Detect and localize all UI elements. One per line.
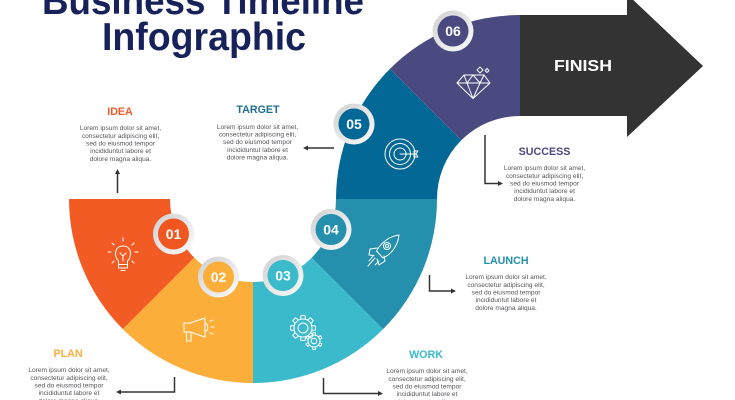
title [42,0,364,59]
text: launch: LAUNCH [483,255,529,267]
text: idea: sed do eiusmod tempor [86,140,156,148]
badge 03: 03 [275,268,291,284]
arrow: launch [430,275,456,294]
text: idea: consectetur adipiscing elit, [82,133,159,140]
text: launch [465,255,547,312]
text: target: incididuntut labore et [227,147,288,154]
text: plan [28,348,110,400]
text: launch: sed do eiusmod tempor [472,290,541,296]
text: launch: Lorem ipsum dolor sit amet, [465,274,547,281]
text: idea: dolore magna aliqua. [90,156,151,163]
text: target: consectetur adipiscing elit, [219,132,296,138]
badge 05: 05 [346,116,362,132]
text: idea: IDEA [107,106,133,118]
text: success: SUCCESS [519,146,570,158]
text: target: sed do eiusmod tempor [223,139,293,146]
icon: light bulb [108,238,138,270]
text: plan: consectetur adipiscing elit, [30,375,108,382]
text: work: consectetur adipiscing elit, [388,376,466,383]
text: work: WORK [409,349,443,361]
segment 3: work [253,258,383,383]
badge 04: 04 [323,222,339,238]
text: success [504,146,585,203]
arrow: idea [115,169,120,193]
text: work: sed do eiusmod tempor [393,384,462,390]
text: success: Lorem ipsum dolor sit amet, [504,165,585,172]
badge 04 [310,209,352,250]
badge 06 [432,10,474,52]
badge 05 [334,104,374,144]
text: launch: incididuntut labore et [476,297,537,304]
arrow: target [303,146,334,150]
text: launch: dolore magna aliqua. [475,305,537,312]
text: work [386,349,468,400]
text: target [217,104,298,162]
text: work: incididuntut labore et [397,391,458,398]
text: plan: incididuntut labore et [39,390,100,397]
text: success: sed do eiusmod tempor [510,180,580,188]
icon: megaphone [184,318,214,341]
text: work: Lorem ipsum dolor sit amet, [386,368,468,375]
text: idea [80,106,161,163]
text: success: incididuntut labore et [514,188,575,195]
finish arrow [520,0,703,137]
finish arrow: FINISH [554,58,612,75]
text: idea: incididuntut labore et [90,148,151,155]
title: Infographic [102,16,306,59]
icon: diamond [457,67,490,98]
text: target: dolore magna aliqua. [227,154,288,162]
arrow: plan [116,377,174,394]
badge 06: 06 [445,23,461,39]
text: success: consectetur adipiscing elit, [506,173,583,180]
icon: target [385,139,418,169]
segment 2: plan [123,258,253,383]
icon: gears [290,316,322,349]
arrow: success [485,135,503,186]
badge 01 [153,214,194,254]
text: idea: Lorem ipsum dolor sit amet, [80,125,161,132]
text: target: TARGET [236,104,280,116]
badge 03 [262,255,304,296]
segment 1: idea [69,199,194,329]
icon: rocket [368,235,399,266]
arrow: work [324,378,383,396]
badge 01: 01 [166,226,181,242]
text: launch: consectetur adipiscing elit, [467,282,545,289]
text: plan: PLAN [53,348,83,360]
text: target: Lorem ipsum dolor sit amet, [217,124,298,131]
segment 4: launch [312,199,437,329]
badge 02 [198,256,239,298]
badge 02: 02 [211,269,226,285]
text: plan: sed do eiusmod tempor [35,382,104,390]
text: success: dolore magna aliqua. [514,196,575,203]
segment 6: success [390,15,520,140]
text: plan: Lorem ipsum dolor sit amet, [28,367,110,374]
segment 5: target [336,69,461,199]
